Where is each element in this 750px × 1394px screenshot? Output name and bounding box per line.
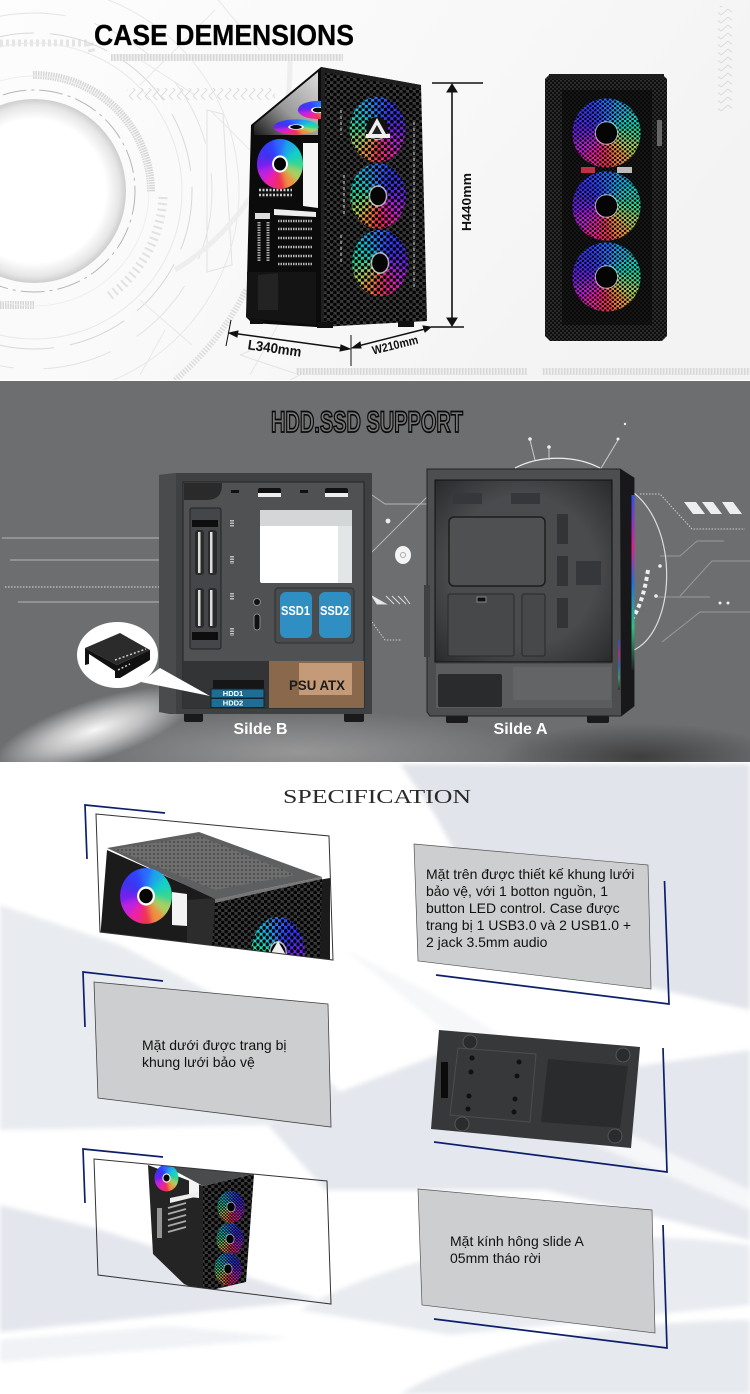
dimension: length arrow (226, 320, 351, 366)
PSU bay (269, 661, 364, 708)
SSD slots: SSD1 (281, 604, 310, 618)
text block: Mặt dưới được trang bị (142, 1037, 286, 1053)
product: side B of case (159, 473, 372, 722)
corner accent (83, 1149, 163, 1203)
panel: underside of case image (431, 1030, 640, 1148)
corner accent (85, 805, 165, 859)
corner accent (436, 881, 669, 1004)
decorative technical circle background (0, 0, 320, 396)
corner accent (434, 1048, 667, 1172)
dimension: width arrow (352, 326, 431, 358)
text block: Mặt kính hông slide A (450, 1233, 585, 1249)
icon: logo triangle (366, 117, 390, 139)
HDD bays: HDD1 (223, 689, 243, 698)
decorative swoosh background (0, 764, 750, 1394)
panel: top description (414, 844, 651, 989)
product: side A of case (424, 469, 634, 723)
motherboard tray cut-out (449, 517, 545, 586)
section: case dimensions (0, 0, 750, 396)
panel: side glass description (418, 1189, 655, 1333)
dimension: height arrow (431, 83, 483, 327)
callout: drive cage zoom (77, 622, 210, 696)
SSD slots: SSD2 (320, 604, 349, 618)
text block: Mặt trên được thiết kế khung lưới (426, 866, 634, 882)
icon: drive cage (85, 633, 150, 678)
title: HDD.SSD SUPPORT (271, 406, 463, 439)
text block: khung lưới bảo vệ (142, 1054, 255, 1070)
text block: trang bị 1 USB3.0 và 2 USB1.0 + (426, 917, 631, 933)
product: angled case view (246, 67, 427, 328)
panel: side glass image (94, 1159, 331, 1304)
dimension: width arrow: W210mm (371, 333, 420, 358)
dimension: length arrow: L340mm (247, 336, 303, 360)
window cut-out (260, 526, 338, 583)
SSD slots (280, 592, 351, 638)
title: CASE DEMENSIONS (94, 20, 354, 52)
decorative circuit lines (2, 440, 750, 650)
title: SPECIFICATION (283, 786, 471, 808)
corner accent (434, 1225, 667, 1348)
text block: 05mm tháo rời (450, 1250, 541, 1266)
corner accent (83, 972, 163, 1027)
text block: bảo vệ, với 1 botton nguồn, 1 (426, 883, 608, 899)
HDD bays: HDD2 (223, 698, 243, 708)
section: specification (0, 763, 750, 1394)
panel: bottom description (94, 982, 331, 1127)
label: side A: Silde A (494, 721, 548, 738)
PSU bay: PSU ATX (289, 678, 345, 693)
drive bracket strip (190, 508, 221, 649)
dimension: height arrow: H440mm (459, 173, 474, 231)
section: HDD and SSD support (0, 380, 750, 794)
text block: 2 jack 3.5mm audio (426, 934, 548, 950)
decorative dots, disc and chevrons (372, 423, 742, 604)
panel: top of case image (96, 814, 334, 961)
HDD bays (211, 680, 264, 708)
label: side B: Silde B (234, 721, 288, 738)
product: front case view (545, 74, 667, 341)
text block: button LED control. Case được (426, 900, 620, 916)
